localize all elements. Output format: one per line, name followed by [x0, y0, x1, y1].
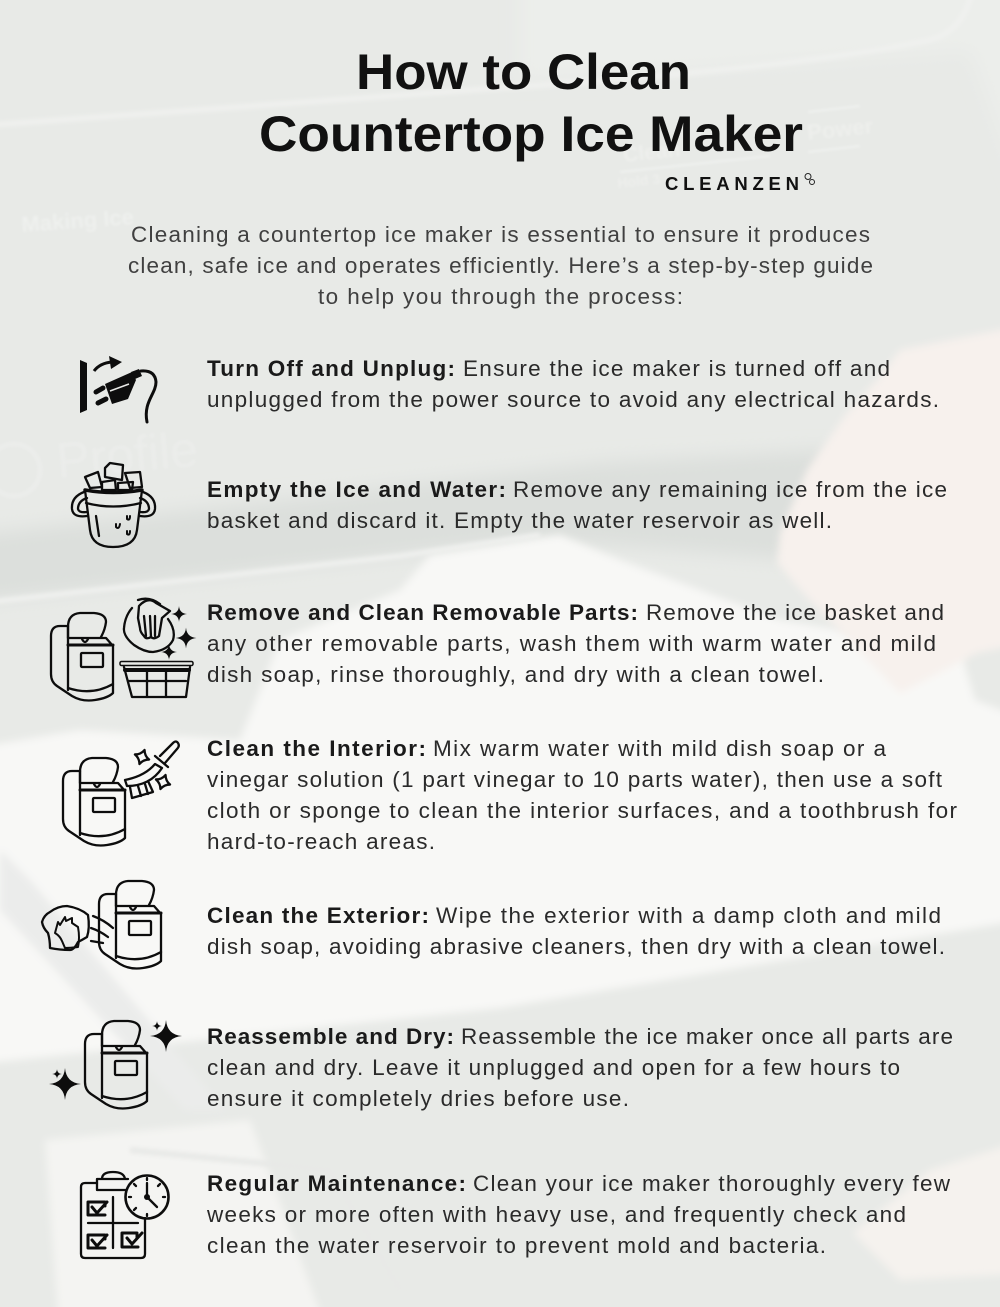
- title: Countertop Ice Maker: [259, 106, 803, 162]
- icon: ice bucket: [72, 463, 155, 547]
- step 2 text: [207, 477, 947, 533]
- title: How to Clean: [356, 44, 691, 100]
- step 4 text: cloth or sponge to clean the interior surfaces, and a toothbrush for: [207, 798, 958, 823]
- step 7 text: Clean your ice maker thoroughly every few: [473, 1171, 951, 1196]
- icon: ice maker with toothbrush: [63, 742, 179, 846]
- step 7 text: [206, 1171, 951, 1258]
- background photo of ice maker: Profile: [54, 421, 200, 489]
- step 4 text: Clean the Interior:: [207, 736, 426, 761]
- step 5 text: dish soap, avoiding abrasive cleaners, then dry with a clean towel.: [207, 934, 945, 959]
- intro text: to help you through the process:: [318, 284, 683, 309]
- step 6 text: Reassemble and Dry:: [207, 1024, 454, 1049]
- step 6 text: [207, 1024, 953, 1111]
- step 6 text: Reassemble the ice maker once all parts are: [461, 1024, 953, 1049]
- step 3 text: dish soap, rinse thoroughly, and dry with a clean towel.: [207, 662, 824, 687]
- step 4 text: hard-to-reach areas.: [207, 829, 435, 854]
- step 2 text: Empty the Ice and Water:: [207, 477, 506, 502]
- step 3 text: Remove the ice basket and: [646, 600, 944, 625]
- icon: checklist clipboard with clock: [81, 1172, 168, 1258]
- step 5 text: Wipe the exterior with a damp cloth and mild: [436, 903, 941, 928]
- step 1 text: [207, 356, 939, 412]
- step 1: turn off and unplug: [80, 356, 939, 422]
- step 3 text: Remove and Clean Removable Parts:: [207, 600, 638, 625]
- brand logo: CLEANZEN: CLEANZEN: [665, 173, 799, 194]
- step 7 text: weeks or more often with heavy use, and frequently check and: [206, 1202, 906, 1227]
- step 4: clean the interior: [63, 736, 958, 854]
- icon: ice maker with hand wiping: [42, 881, 161, 968]
- background photo of ice maker: Making Ice: [21, 204, 135, 237]
- step 5 text: [207, 903, 945, 959]
- icon: ice maker, hand with cloth and basket: [51, 599, 196, 700]
- background photo of ice maker: Hold 3: [617, 171, 661, 191]
- step 2: empty ice and water: [72, 463, 947, 547]
- icon: ice maker with sparkles: [49, 1020, 182, 1108]
- background photo of ice maker: Power: [806, 113, 875, 145]
- title: [259, 44, 803, 162]
- intro text: [128, 222, 873, 309]
- step 3 text: [207, 600, 944, 687]
- step 6: reassemble and dry: [49, 1020, 953, 1111]
- step 1 text: unplugged from the power source to avoid any electrical hazards.: [207, 387, 939, 412]
- step 1 text: Ensure the ice maker is turned off and: [463, 356, 890, 381]
- step 6 text: ensure it completely dries before use.: [207, 1086, 629, 1111]
- step 4 text: vinegar solution (1 part vinegar to 10 parts water), then use a soft: [207, 767, 943, 792]
- step 4 text: [207, 736, 958, 854]
- step 6 text: clean and dry. Leave it unplugged and open for a few hours to: [207, 1055, 900, 1080]
- intro text: Cleaning a countertop ice maker is essential to ensure it produces: [131, 222, 870, 247]
- icon: plug pulled from wall: [80, 356, 156, 422]
- background photo of ice maker: Clean: [622, 138, 681, 167]
- step 1 text: Turn Off and Unplug:: [207, 356, 455, 381]
- step 4 text: Mix warm water with mild dish soap or a: [433, 736, 886, 761]
- step 3 text: any other removable parts, wash them with warm water and mild: [207, 631, 936, 656]
- intro text: clean, safe ice and operates efficiently. Here’s a step-by-step guide: [128, 253, 873, 278]
- step 2 text: basket and discard it. Empty the water reservoir as well.: [207, 508, 832, 533]
- step 7 text: clean the water reservoir to prevent mold and bacteria.: [207, 1233, 826, 1258]
- step 3: remove and clean removable parts: [51, 599, 944, 700]
- step 2 text: Remove any remaining ice from the ice: [513, 477, 947, 502]
- step 7 text: Regular Maintenance:: [207, 1171, 466, 1196]
- step 7: regular maintenance: [81, 1171, 951, 1258]
- step 5: clean the exterior: [42, 881, 945, 968]
- step 5 text: Clean the Exterior:: [207, 903, 429, 928]
